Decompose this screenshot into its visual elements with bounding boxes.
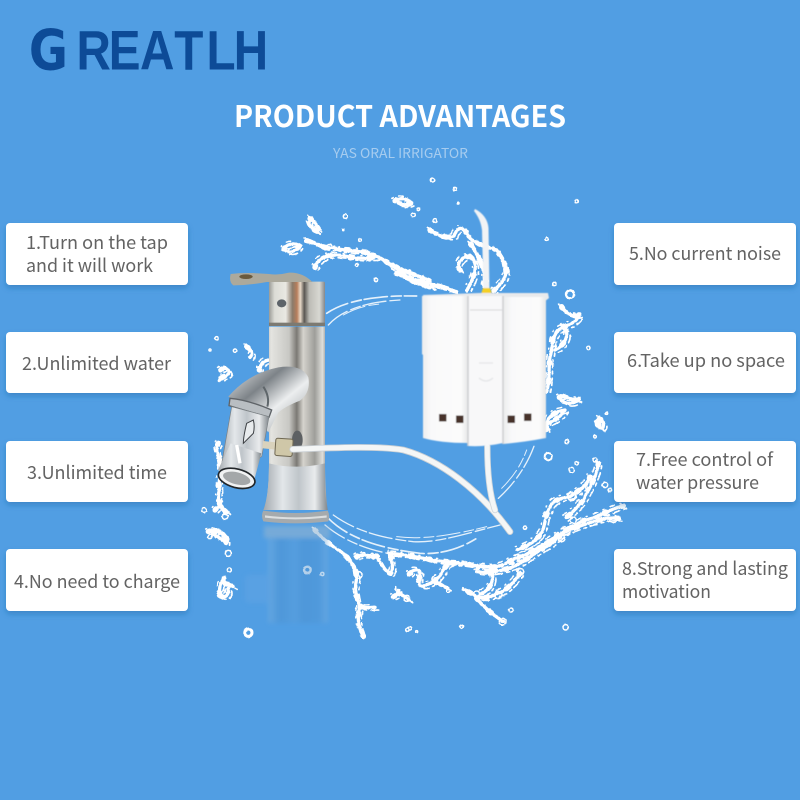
advantage card 7 (614, 441, 796, 502)
advantage card 7: water pressure (636, 469, 759, 495)
advantage card 6 (614, 332, 796, 393)
device top lip (423, 293, 549, 302)
water splash illustration (202, 178, 627, 639)
advantage card 8: motivation (622, 578, 711, 604)
advantage card 5: 5.No current noise (629, 240, 781, 266)
device hose (487, 447, 495, 510)
advantage card 4: 4.No need to charge (14, 568, 180, 594)
subtitle: YAS ORAL IRRIGATOR (332, 142, 468, 162)
advantage card 1: and it will work (26, 252, 153, 278)
spout (228, 367, 309, 432)
faucet upper collar (269, 282, 325, 324)
right housing (503, 297, 546, 444)
advantage card 2 (6, 332, 188, 393)
oral irrigator device (422, 209, 549, 446)
faucet lever handle (230, 273, 312, 285)
main hose (293, 447, 510, 532)
faucet reflection (245, 526, 330, 623)
yellow collar (480, 288, 493, 297)
brass hose connector (262, 441, 276, 450)
tap adapter (220, 407, 269, 473)
advantage card 2: 2.Unlimited water (22, 350, 172, 376)
brand logo: GREATLH (29, 19, 268, 84)
title: PRODUCT ADVANTAGES (234, 92, 566, 136)
advantage card 7: 7.Free control of (636, 446, 774, 472)
centre panel (468, 296, 503, 446)
advantage card 3: 3.Unlimited time (27, 459, 167, 485)
advantage card 3 (6, 441, 188, 502)
advantage card 8: 8.Strong and lasting (622, 555, 788, 581)
droplets (202, 178, 616, 636)
advantage card 1: 1.Turn on the tap (26, 229, 168, 255)
left housing (422, 296, 468, 443)
advantage card 1 (6, 223, 188, 285)
aerator (216, 465, 257, 492)
faucet base (262, 511, 329, 523)
foamy strands (206, 196, 627, 639)
advantage card 8 (614, 549, 796, 611)
advantage card 5 (614, 223, 796, 285)
faucet (216, 273, 329, 523)
nozzle tip (474, 209, 490, 292)
irrigator water tubes (293, 447, 510, 532)
advantage card 4 (6, 549, 188, 611)
vent windows (439, 414, 446, 422)
faucet dark detail (277, 299, 286, 307)
thin swirl arcs (325, 296, 535, 556)
faucet lower body (263, 327, 328, 510)
advantage card 6: 6.Take up no space (627, 347, 785, 373)
